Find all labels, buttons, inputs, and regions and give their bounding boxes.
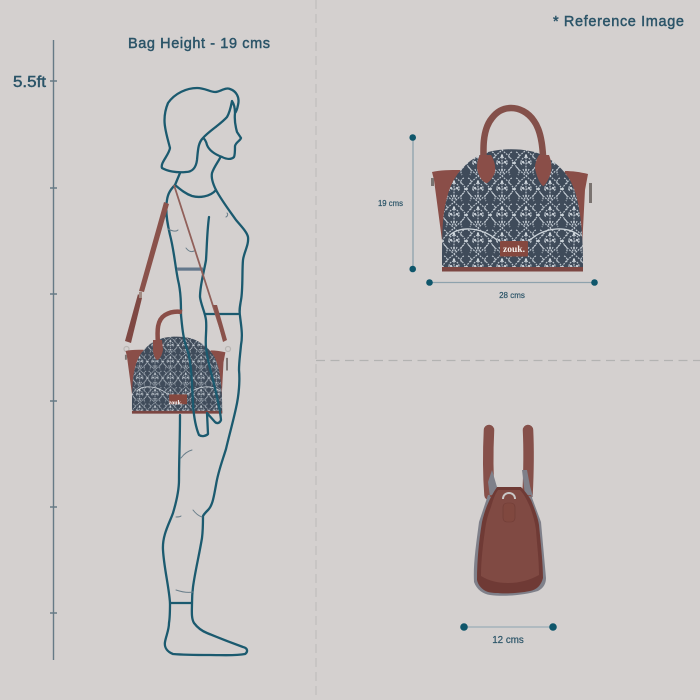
small bag handle (158, 312, 182, 344)
front logo text: zouk. (503, 245, 525, 255)
front handle (483, 108, 544, 172)
side ring (503, 493, 515, 499)
hair and face (162, 88, 241, 172)
side leather body (477, 487, 543, 593)
top waist band (177, 268, 203, 271)
dimension: depth: 12 cms (492, 635, 524, 646)
heading: bag height: Bag Height - 19 cms (128, 36, 270, 52)
dimension: height: 19 cms (378, 199, 403, 208)
side tab (503, 503, 515, 522)
height scale axis (50, 40, 57, 660)
scale label: 5.5ft: 5.5ft (13, 74, 47, 91)
left handle tab (477, 155, 495, 183)
waist band (206, 313, 238, 315)
note: reference image: * Reference Image (553, 14, 684, 30)
back and arm (166, 185, 181, 315)
small bag logo text: zouk. (169, 400, 183, 406)
dimension: height (378, 134, 416, 272)
neck and collar (175, 158, 220, 197)
right handle tab (535, 155, 551, 186)
product front view (431, 108, 592, 272)
arm drawn over bag (181, 315, 221, 436)
figure outline: woman in profile (162, 88, 248, 655)
torso and front leg (163, 190, 248, 655)
side handles (488, 430, 490, 495)
body crease marks (168, 213, 228, 592)
patterned gusset edges (474, 470, 546, 596)
small bag carried by figure (125, 312, 228, 414)
shoulder straps (124, 185, 230, 352)
ankle band (170, 602, 192, 604)
inner arm (200, 217, 209, 348)
side leather panel (481, 490, 539, 583)
product side view (474, 430, 546, 596)
dimension: depth (460, 623, 557, 646)
dimension: width (426, 279, 598, 300)
dimension: width: 28 cms (499, 291, 525, 300)
